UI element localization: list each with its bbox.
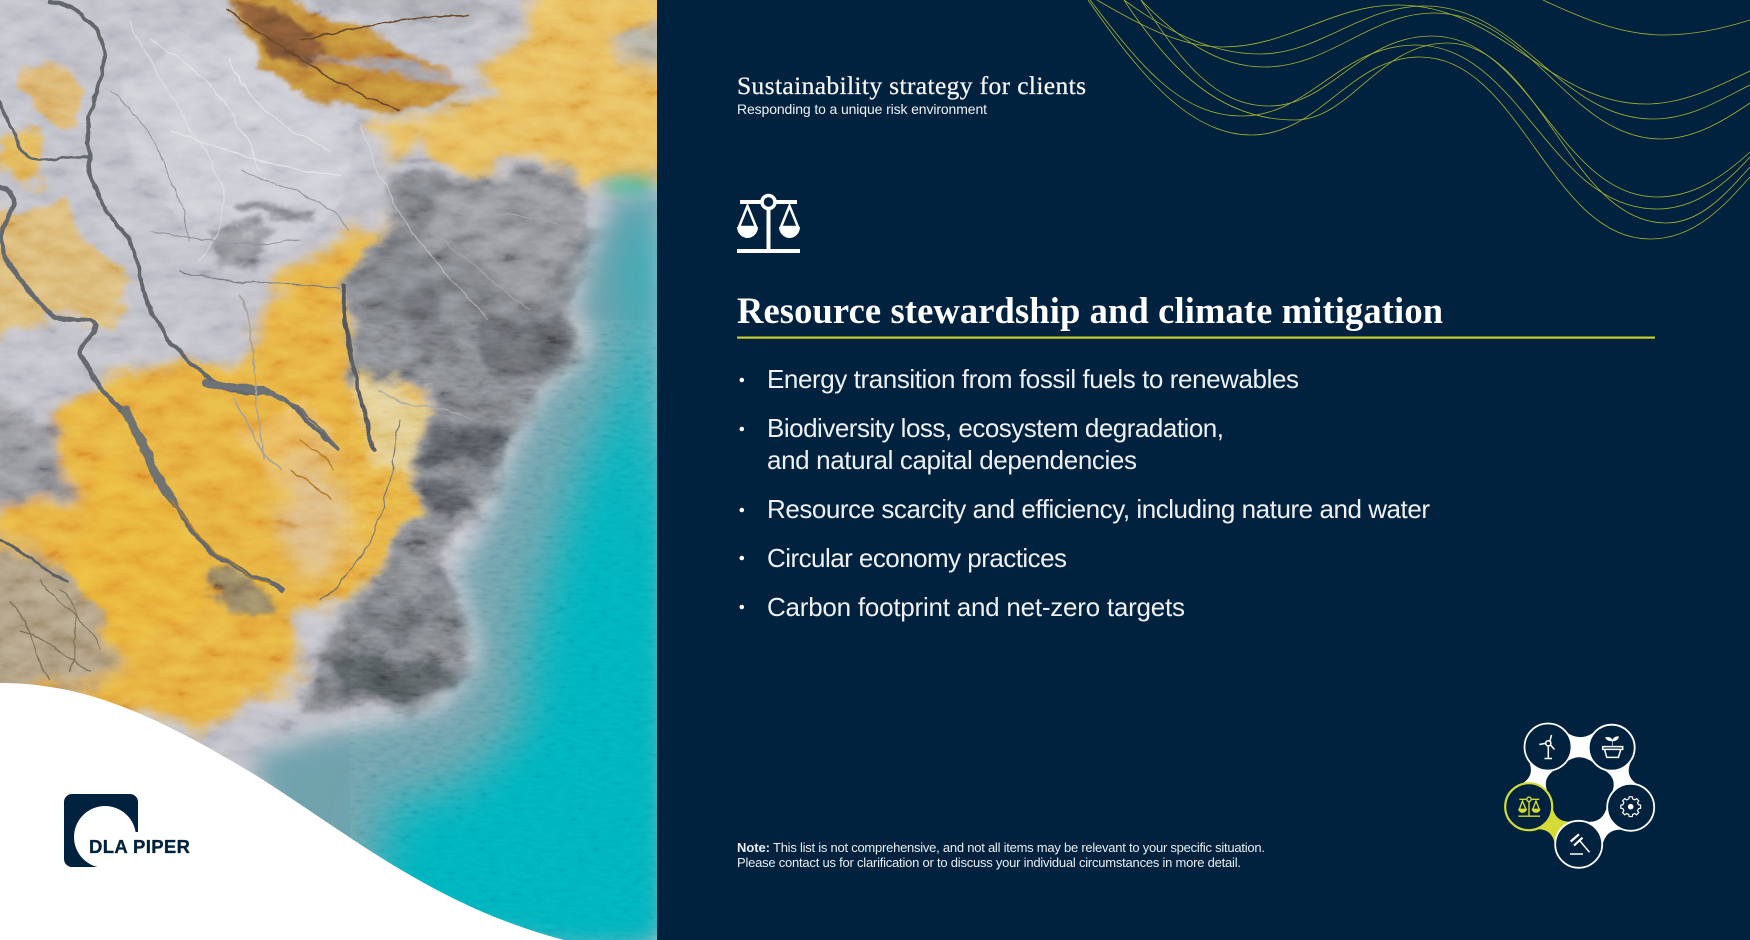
DLA Piper logo (64, 794, 190, 868)
navigation ring diagram (1505, 724, 1654, 868)
land masses (0, 0, 670, 730)
water ripple texture (350, 320, 657, 940)
bullet 5: Carbon footprint and net-zero targets (767, 592, 1185, 622)
ring connectors (1520, 732, 1640, 846)
heading underline (737, 336, 1655, 339)
navy background panel (657, 0, 1750, 940)
bullet 3: Resource scarcity and efficiency, including nature and water (767, 494, 1430, 524)
green tint on the shoreline (602, 178, 654, 194)
bullet 4: Circular economy practices (767, 543, 1067, 573)
bullet 2 (740, 413, 1224, 475)
grey sediment along the shoreline (295, 168, 598, 712)
aerial photograph of sediment delta and turquoise water (0, 0, 670, 940)
icon: scales of justice (737, 196, 800, 253)
footnote (737, 840, 1265, 870)
footnote: Please contact us for clarification or to discuss your individual circumstances in more detail. (737, 855, 1241, 870)
bullet 2: Biodiversity loss, ecosystem degradation, (767, 413, 1224, 443)
ring icon: wind turbine (1524, 724, 1572, 770)
header: subtitle: Responding to a unique risk environment (737, 101, 987, 117)
decorative wave lines (1088, 0, 1750, 239)
terrain texture (0, 0, 657, 769)
ring icon: gavel (1555, 821, 1602, 868)
section heading: Resource stewardship and climate mitigation (737, 290, 1443, 331)
white wave shape over the photo (0, 683, 564, 940)
river channels (0, 0, 560, 680)
footnote: This list is not comprehensive, and not all items may be relevant to your specific situation. (773, 840, 1265, 855)
turquoise water (360, 170, 657, 940)
ring icon: gear (1607, 784, 1654, 831)
footnote: Note: (737, 840, 770, 855)
header: report title: Sustainability strategy for clients (737, 71, 1086, 100)
bullet list (740, 364, 1430, 622)
DLA Piper logo: DLA PIPER (89, 836, 190, 857)
slate haze where the sediment meets the water (255, 190, 657, 940)
ring icon: plant pot (1589, 725, 1635, 771)
ring icon: scales highlighted (1505, 783, 1552, 830)
solid turquoise in the lower right (477, 431, 657, 940)
bullet 1: Energy transition from fossil fuels to renewables (767, 364, 1299, 394)
bullet 2: and natural capital dependencies (767, 445, 1137, 475)
